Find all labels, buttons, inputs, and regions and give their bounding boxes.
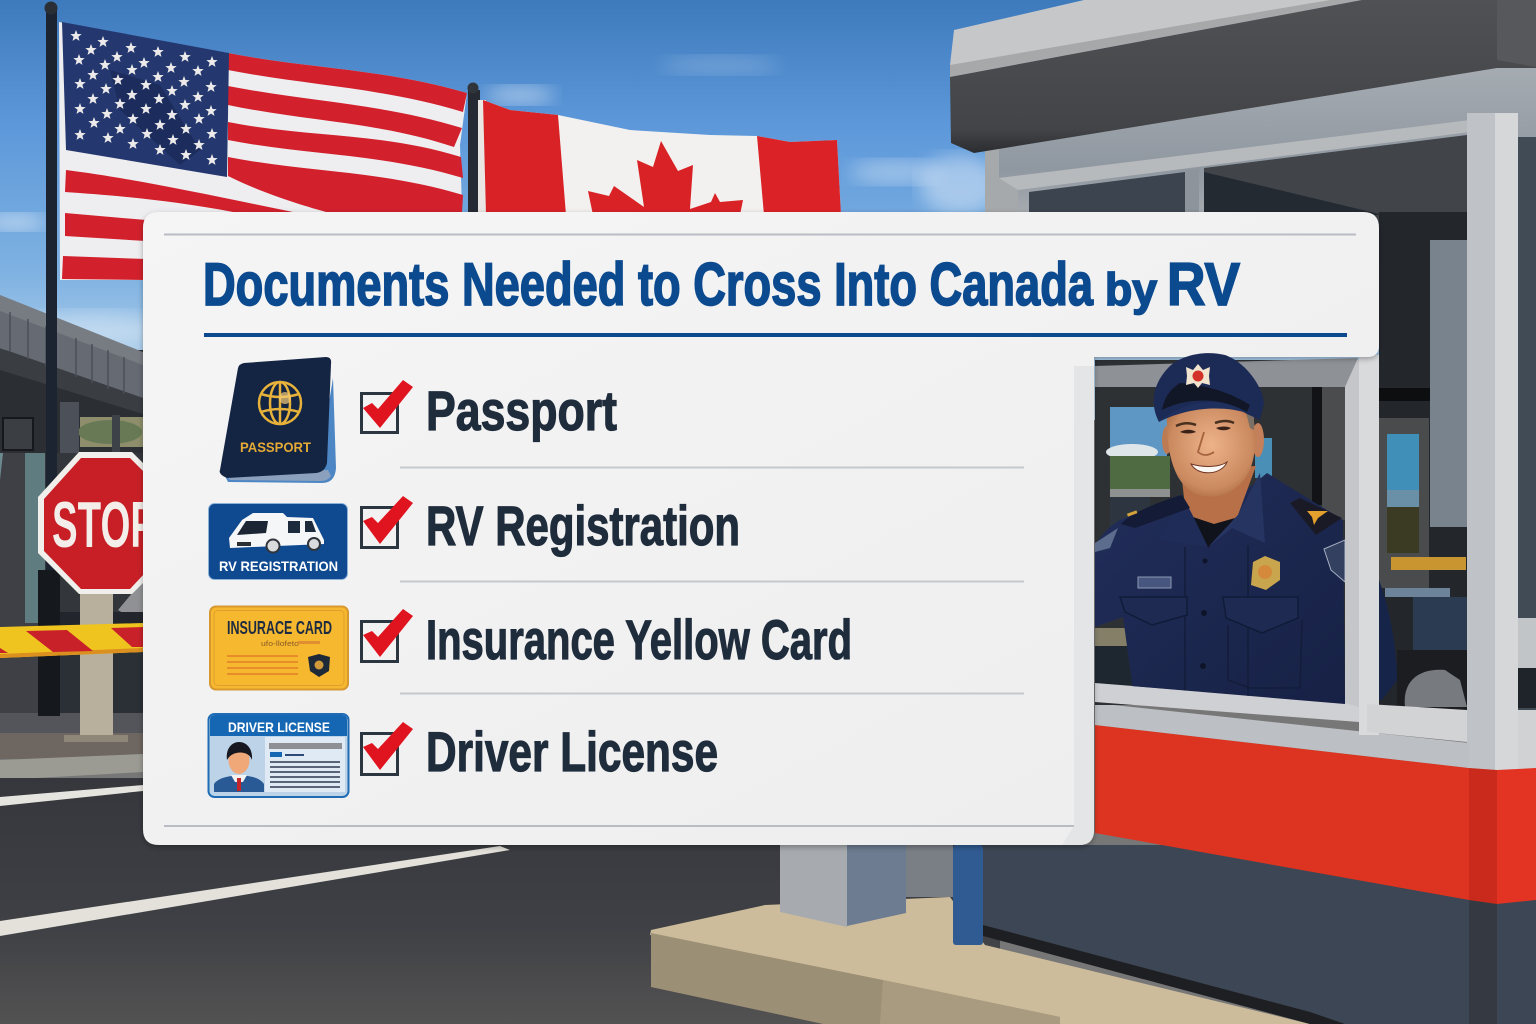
shoulder patch bbox=[1324, 540, 1345, 582]
concrete pillar and curb bbox=[650, 845, 1310, 1024]
US flag bbox=[59, 22, 467, 280]
icon: passport: PASSPORT bbox=[240, 439, 311, 455]
globe emblem bbox=[259, 382, 301, 424]
icon: RV registration card: RV REGISTRATION bbox=[219, 558, 338, 574]
smile bbox=[1191, 462, 1227, 473]
head bbox=[1162, 426, 1170, 454]
cap bbox=[1154, 353, 1264, 422]
epaulettes bbox=[1121, 495, 1190, 528]
booth column bbox=[1467, 113, 1495, 773]
booth upper frame bbox=[985, 64, 1536, 240]
shirt bbox=[1095, 473, 1345, 705]
row: driver license bbox=[208, 714, 718, 797]
sill band bbox=[1095, 703, 1469, 768]
icon: driver license card: DRIVER LICENSE bbox=[228, 719, 330, 735]
label: driver license: Driver License bbox=[426, 720, 718, 783]
collar bbox=[1185, 508, 1208, 547]
stop sign and post bbox=[38, 452, 156, 742]
badge bbox=[1251, 556, 1280, 590]
barrier arm bbox=[0, 623, 143, 658]
Canadian flag bbox=[478, 100, 841, 215]
eyes bbox=[1180, 426, 1231, 434]
far right pane bbox=[1518, 137, 1536, 712]
officer bbox=[1095, 353, 1345, 705]
red band bbox=[1095, 725, 1469, 900]
title: by bbox=[1105, 264, 1157, 315]
icon: insurance yellow card: ufo-llofeto bbox=[261, 641, 299, 648]
row: passport bbox=[220, 357, 617, 483]
road and sidewalk bbox=[0, 713, 1000, 1024]
row: RV registration bbox=[208, 494, 740, 580]
sky background bbox=[0, 0, 1536, 420]
booth lower wall bbox=[983, 845, 1536, 1024]
cap badge bbox=[1186, 364, 1210, 388]
booth window frame bbox=[1095, 355, 1467, 742]
row: insurance card bbox=[210, 606, 852, 690]
name tag bbox=[1138, 577, 1171, 588]
label: passport: Passport bbox=[426, 379, 617, 442]
icon: driver license card bbox=[208, 714, 348, 797]
booth roof bbox=[950, 0, 1362, 77]
placket and pockets bbox=[1185, 545, 1248, 700]
booth window scene behind officer bbox=[1095, 360, 1357, 705]
left border station building bbox=[0, 295, 143, 715]
checkbox: RV registration bbox=[362, 496, 413, 548]
icon: passport bbox=[220, 357, 336, 483]
title: Documents Needed to Cross Into Canada bbox=[203, 251, 1093, 318]
flag poles bbox=[38, 2, 480, 716]
union canton with stars bbox=[62, 22, 229, 177]
title: RV bbox=[1167, 251, 1240, 318]
label: RV registration: RV Registration bbox=[426, 494, 740, 557]
checkbox: passport bbox=[362, 380, 413, 432]
title rule bbox=[204, 333, 1347, 337]
neck bbox=[1182, 466, 1256, 524]
white checklist panel bbox=[143, 212, 1379, 845]
far arm of officer bbox=[1379, 580, 1397, 700]
booth glass right bbox=[1379, 212, 1469, 712]
icon: RV registration card bbox=[208, 504, 348, 580]
checkbox: insurance card bbox=[362, 609, 413, 662]
label: insurance yellow card: Insurance Yellow Card bbox=[426, 608, 852, 671]
border booth bbox=[950, 0, 1536, 1024]
icon: insurance yellow card bbox=[210, 606, 348, 690]
stop sign and post: STOP bbox=[52, 488, 156, 561]
checkbox: driver license bbox=[362, 722, 413, 774]
icon: insurance yellow card: INSURACE CARD bbox=[227, 618, 332, 638]
